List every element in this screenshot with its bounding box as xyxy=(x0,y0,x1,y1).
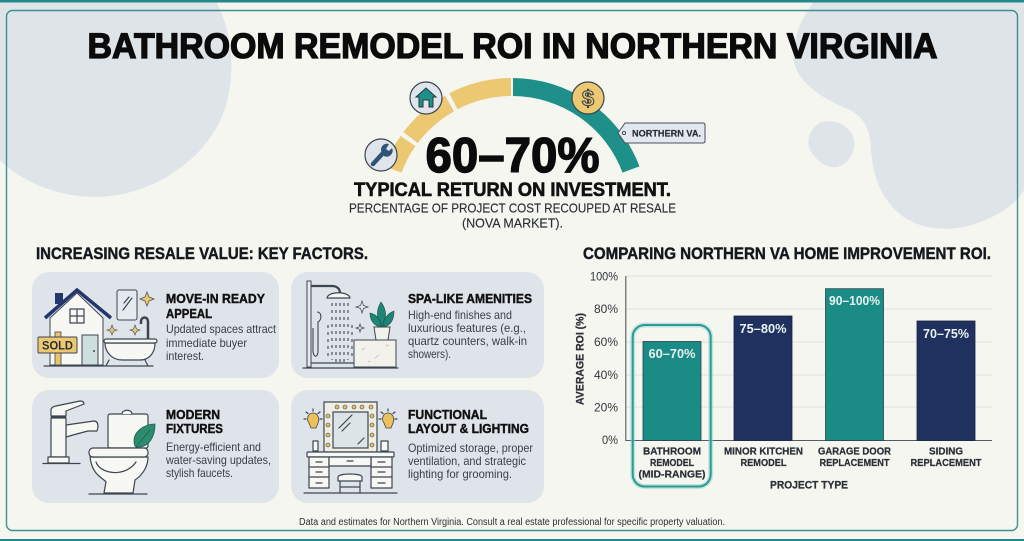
description: interest. xyxy=(166,349,204,363)
description: water-saving updates, xyxy=(165,453,271,467)
title: BATHROOM REMODEL ROI IN NORTHERN VIRGINIA xyxy=(88,27,938,66)
tag: Northern VA: NORTHERN VA. xyxy=(632,128,701,138)
icon: house with sold sign and bathtub xyxy=(38,290,157,366)
description: lighting for grooming. xyxy=(408,467,512,481)
heading line 2: APPEAL xyxy=(166,307,212,321)
heading: modern: MODERN xyxy=(166,408,220,422)
category labels: (MID-RANGE) xyxy=(638,468,706,480)
heading: move-in ready: MOVE-IN READY xyxy=(166,292,266,306)
panel: modern fixtures xyxy=(32,390,279,503)
icon: house xyxy=(410,82,442,114)
gauge arc: teal segment xyxy=(513,87,631,170)
bar: bathroom remodel xyxy=(643,342,701,440)
gauge: typical ROI xyxy=(365,82,705,183)
bar: siding replacement: 70–75% xyxy=(923,326,969,341)
description xyxy=(408,308,527,361)
description: ventilation, and strategic xyxy=(408,454,526,468)
icon: wrench xyxy=(365,139,397,171)
description: Energy-efficient and xyxy=(166,440,261,454)
icon: dollar coin xyxy=(572,82,604,114)
subheading: typical return: TYPICAL RETURN ON INVESTMENT. xyxy=(354,180,671,201)
bar: minor kitchen remodel: 75–80% xyxy=(740,321,787,336)
category labels: GARAGE DOOR xyxy=(818,446,891,458)
category labels: MINOR KITCHEN xyxy=(724,446,803,458)
heading line 2: LAYOUT & LIGHTING xyxy=(408,422,529,436)
footer note: Data and estimates for Northern Virginia. Consult a real estate professional for specific property valuation. xyxy=(299,517,725,528)
description: luxurious features (e.g., xyxy=(408,321,526,335)
y axis labels: 0% xyxy=(602,433,618,447)
description: percentage recouped: (NOVA MARKET). xyxy=(462,216,563,230)
description: percentage recouped xyxy=(349,200,676,230)
panel: functional layout and lighting xyxy=(291,390,544,503)
x axis title: PROJECT TYPE xyxy=(770,480,848,492)
bar chart: average ROI by project type xyxy=(574,270,992,492)
bar: siding replacement xyxy=(917,321,975,440)
category labels: REMODEL xyxy=(650,457,694,469)
category labels xyxy=(638,446,982,480)
description: High-end finishes and xyxy=(408,308,512,322)
category labels: REPLACEMENT xyxy=(910,457,982,469)
y axis labels: 80% xyxy=(594,302,618,316)
highlight around bathroom remodel xyxy=(633,325,711,486)
icon: dollar coin: $ xyxy=(582,86,594,111)
y axis labels xyxy=(590,270,618,447)
category labels: REMODEL xyxy=(740,457,787,469)
big percentage: 60–70% xyxy=(426,129,600,183)
description xyxy=(165,440,271,480)
description xyxy=(408,441,533,481)
heading: spa-like amenities: SPA-LIKE AMENITIES xyxy=(408,292,532,306)
heading: key factors: INCREASING RESALE VALUE: KEY FACTORS. xyxy=(36,244,368,263)
category labels: REPLACEMENT xyxy=(820,457,890,469)
description: percentage recouped: PERCENTAGE OF PROJECT COST RECOUPED AT RESALE xyxy=(349,200,676,216)
tag: Northern VA xyxy=(618,123,705,143)
description: Optimized storage, proper xyxy=(408,441,533,455)
description: Updated spaces attract xyxy=(166,322,277,336)
icon: vanity with lit mirror xyxy=(304,402,397,493)
description: stylish faucets. xyxy=(166,466,233,480)
bar: garage door replacement: 90–100% xyxy=(829,293,880,308)
description: quartz counters, walk-in xyxy=(408,334,527,348)
panel: move-in ready appeal xyxy=(32,272,279,378)
icon: shower, plant and counter xyxy=(303,281,398,368)
category labels: SIDING xyxy=(929,446,963,458)
y axis labels: 20% xyxy=(594,400,618,414)
y axis labels: 100% xyxy=(590,270,618,284)
heading: functional: FUNCTIONAL xyxy=(408,408,487,422)
heading line 2: FIXTURES xyxy=(166,422,223,436)
bar: garage door replacement xyxy=(826,289,884,440)
category labels: BATHROOM xyxy=(643,446,701,458)
y axis labels: 40% xyxy=(594,368,618,382)
gauge arc: yellow segments xyxy=(393,87,511,170)
bar: bathroom remodel: 60–70% xyxy=(648,346,696,361)
description: showers). xyxy=(408,347,451,361)
bar: minor kitchen remodel xyxy=(734,316,792,440)
icon: house with sold sign and bathtub: SOLD xyxy=(42,340,73,352)
description: immediate buyer xyxy=(166,336,247,350)
y axis labels: 60% xyxy=(594,335,618,349)
panel: spa-like amenities xyxy=(291,272,544,378)
description xyxy=(166,322,277,363)
icon: faucet and toilet with leaf xyxy=(43,401,155,494)
y axis title: AVERAGE ROI (%) xyxy=(574,313,586,405)
